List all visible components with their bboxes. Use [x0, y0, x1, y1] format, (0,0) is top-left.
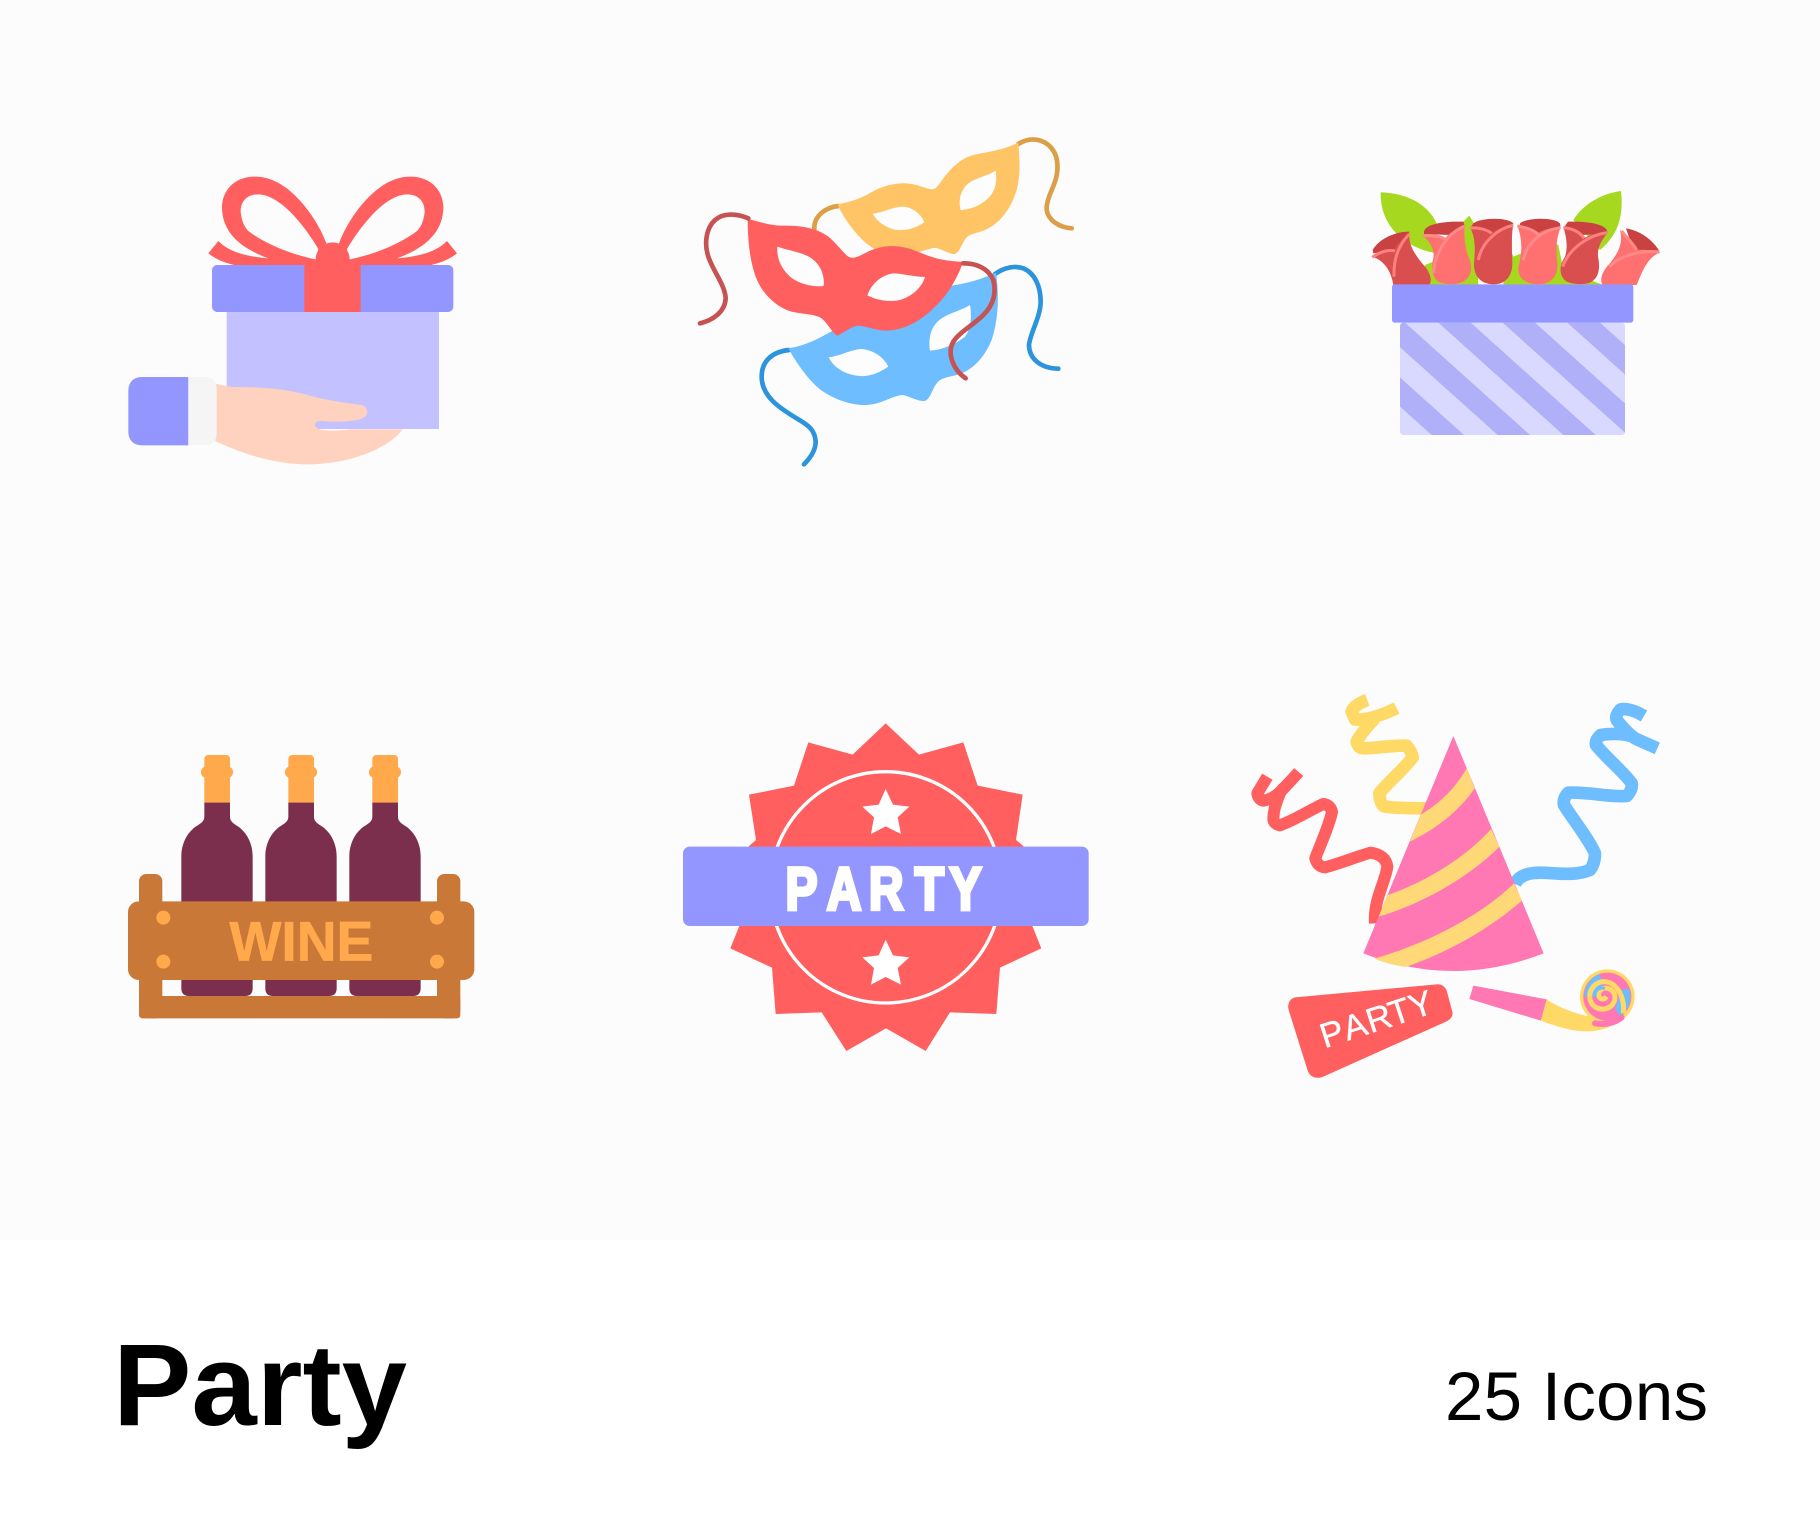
- blower tube: [1469, 986, 1547, 1021]
- hat cone: [1363, 736, 1544, 971]
- gift lid: [212, 265, 453, 312]
- icon: carnival masks: [700, 139, 1072, 464]
- yellow mask eyes: [873, 171, 996, 230]
- sleeve: [128, 377, 188, 445]
- wooden crate: [128, 874, 474, 1018]
- icon: gift box on hand: [128, 177, 457, 464]
- banner: [683, 847, 1089, 926]
- yellow mask: [837, 143, 1020, 254]
- blower spiral: [1580, 969, 1635, 1024]
- banner text: PARTY: [785, 855, 981, 923]
- shirt cuff: [188, 377, 217, 445]
- box with diagonal stripes: [1400, 322, 1625, 435]
- rose 2: [1423, 222, 1471, 284]
- blower mouth section: [1541, 999, 1610, 1031]
- hat stripes: [1375, 768, 1522, 967]
- gift box body: [227, 312, 439, 429]
- rose 4: [1517, 219, 1561, 284]
- bottle 2: [265, 755, 337, 996]
- gift bow: [208, 177, 457, 276]
- rose far left: [1372, 232, 1431, 285]
- red mask ties: [700, 215, 995, 378]
- blue mask: [788, 273, 998, 405]
- icon: wine crate: [128, 755, 474, 1018]
- blue mask eyes: [829, 305, 971, 376]
- icon: party badge: [683, 723, 1089, 1051]
- rose 5: [1561, 222, 1607, 284]
- title: Party: [113, 1320, 407, 1450]
- rose far right: [1601, 228, 1660, 285]
- badge ring: [770, 772, 1001, 1003]
- starburst: [730, 723, 1041, 1051]
- bottle 3: [349, 755, 421, 996]
- top star: [862, 789, 909, 834]
- blue streamer: [1515, 709, 1657, 884]
- wine label: WINE: [229, 910, 373, 972]
- rose 3: [1470, 219, 1513, 284]
- yellow mask ties: [814, 139, 1072, 230]
- red mask eyes: [777, 247, 925, 301]
- bottom star: [862, 940, 909, 985]
- box lid: [1392, 284, 1633, 323]
- icon: flower box: [1372, 191, 1660, 435]
- hand: [213, 383, 403, 464]
- icon: party hat and blower: [1257, 700, 1657, 1078]
- yellow streamer: [1352, 700, 1427, 808]
- red streamer: [1257, 772, 1387, 923]
- red mask: [748, 219, 963, 336]
- party tag: [1288, 984, 1453, 1078]
- blue mask ties: [762, 267, 1058, 464]
- icon count: 25 Icons: [1445, 1358, 1708, 1435]
- gift ribbon band: [304, 265, 361, 312]
- party tag text: PARTY: [1315, 984, 1438, 1056]
- bottle 1: [181, 755, 253, 996]
- leaves: [1381, 191, 1622, 285]
- crate rivets: [156, 911, 444, 969]
